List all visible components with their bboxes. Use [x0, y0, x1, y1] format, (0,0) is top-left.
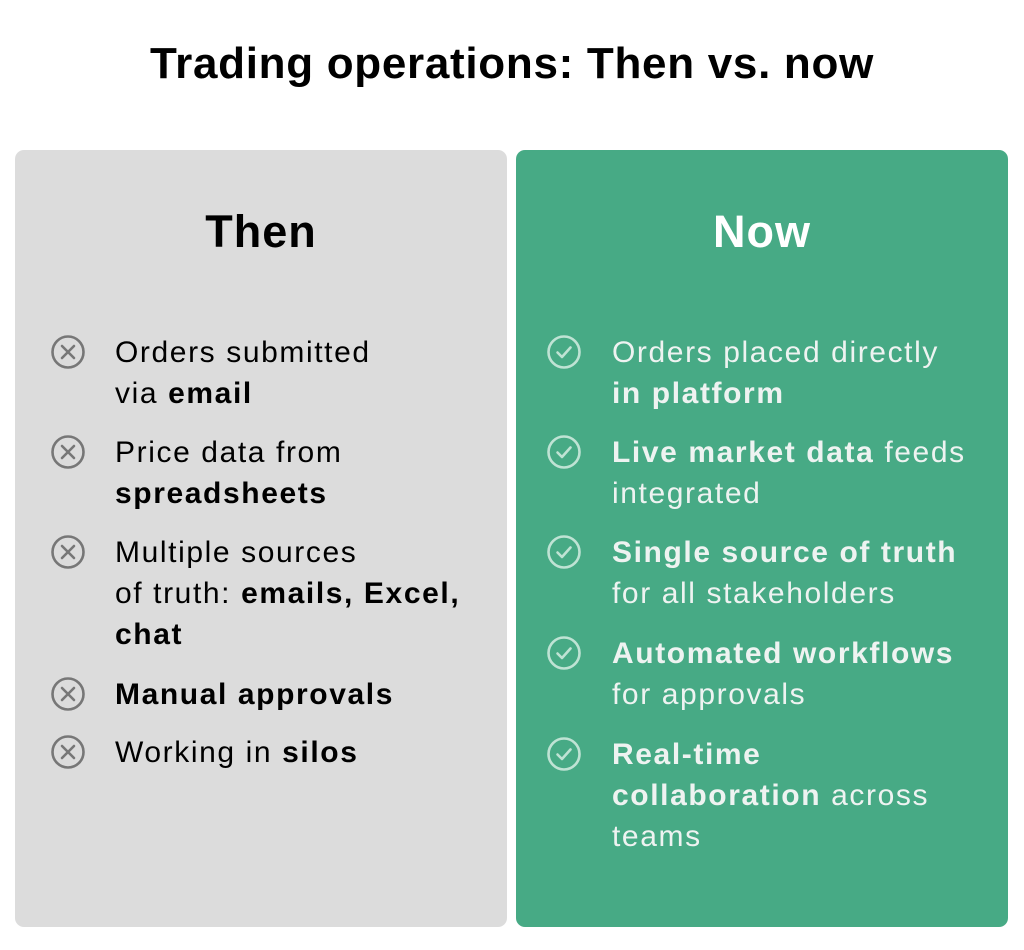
item 4: Manual approvals	[115, 678, 394, 711]
icon: check 1	[547, 335, 581, 369]
icon: x 3	[51, 535, 85, 569]
item 3: Single source of truth	[612, 536, 957, 569]
icon: check 4	[547, 636, 581, 670]
heading: then: Then	[205, 206, 317, 257]
item 5: teams	[612, 820, 702, 853]
item 4: Automated workflows	[612, 637, 954, 670]
then items	[51, 335, 460, 769]
item 2	[115, 436, 342, 510]
item 1	[612, 336, 939, 410]
item 4	[612, 637, 954, 711]
icon: check 2	[547, 435, 581, 469]
item 3	[612, 536, 957, 610]
item 2: Live market data feeds	[612, 436, 966, 469]
item 1: Orders placed directly	[612, 336, 939, 369]
item 3	[115, 536, 460, 651]
item 1: Orders submitted	[115, 336, 371, 369]
item 3: for all stakeholders	[612, 577, 896, 610]
item 5: Real-time	[612, 738, 761, 771]
item 2	[612, 436, 966, 510]
panel: then	[15, 150, 507, 927]
item 5: Working in silos	[115, 736, 358, 769]
item 3: Multiple sources	[115, 536, 357, 569]
now items	[547, 335, 966, 853]
heading: now: Now	[713, 206, 811, 257]
icon: check 5	[547, 737, 581, 771]
icon: x 5	[51, 735, 85, 769]
item 4: for approvals	[612, 678, 806, 711]
item 2: integrated	[612, 477, 761, 510]
panel: now	[516, 150, 1008, 927]
item 2: Price data from	[115, 436, 342, 469]
icon: x 1	[51, 335, 85, 369]
icon: x 4	[51, 677, 85, 711]
item 5	[612, 738, 929, 853]
item 1	[115, 336, 371, 410]
item 1: via email	[115, 377, 253, 410]
icon: check 3	[547, 535, 581, 569]
icon: x 2	[51, 435, 85, 469]
item 5: collaboration across	[612, 779, 929, 812]
item 3: chat	[115, 618, 183, 651]
item 3: of truth: emails, Excel,	[115, 577, 460, 610]
item 2: spreadsheets	[115, 477, 328, 510]
item 1: in platform	[612, 377, 785, 410]
title: Trading operations: Then vs. now	[150, 39, 874, 88]
